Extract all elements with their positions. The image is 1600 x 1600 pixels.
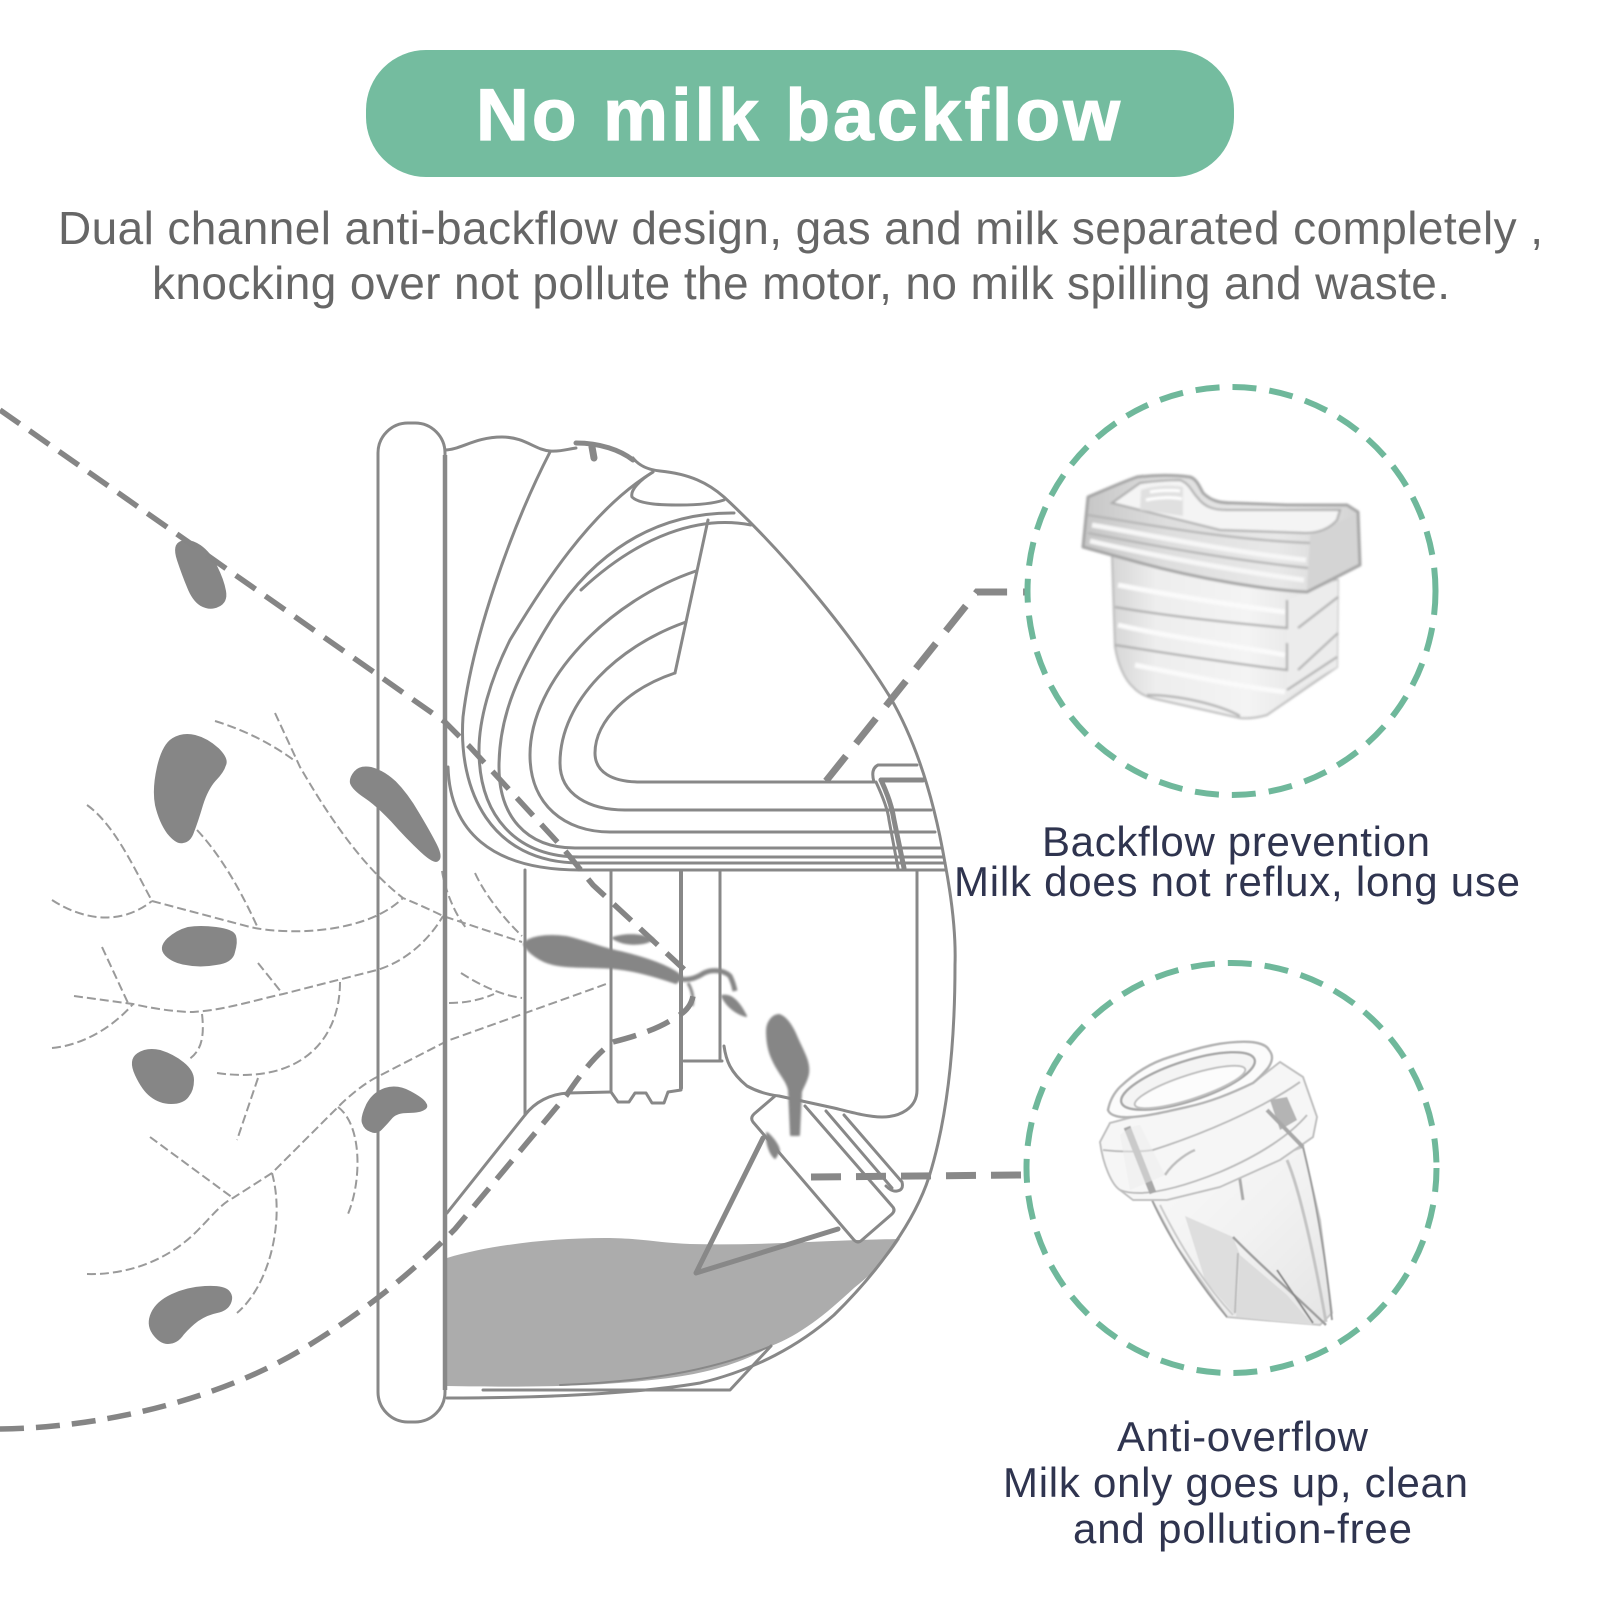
icon: silicone backflow valve bbox=[1083, 476, 1360, 718]
callout connector upper bbox=[826, 592, 1027, 781]
caption: backflow prevention: Milk does not reflux, long use bbox=[954, 858, 1520, 905]
caption: anti-overflow: Anti-overflow bbox=[1117, 1413, 1369, 1460]
caption: anti-overflow: and pollution-free bbox=[1073, 1505, 1412, 1552]
caption: anti-overflow: Milk only goes up, clean bbox=[1003, 1459, 1468, 1506]
milk fill in bottle bbox=[447, 1238, 900, 1387]
icon: clear duckbill valve bbox=[1100, 1040, 1332, 1325]
lower chamber lines bbox=[447, 870, 917, 1213]
milk drops bbox=[133, 541, 440, 1343]
nested channel lines bbox=[448, 452, 945, 870]
caption: anti-overflow bbox=[1003, 1413, 1468, 1552]
caption: backflow prevention: Backflow prevention bbox=[1042, 818, 1430, 865]
callout connector lower bbox=[811, 1175, 1022, 1177]
description text: Dual channel anti-backflow design, gas and milk separated completely , bbox=[58, 202, 1543, 254]
dashed circle lower bbox=[1026, 963, 1436, 1373]
milk flowing through channel bbox=[524, 935, 808, 1158]
dashed circle upper bbox=[1028, 387, 1436, 795]
breast shield flange bbox=[378, 423, 445, 1422]
description text bbox=[58, 202, 1543, 309]
description text: knocking over not pollute the motor, no milk spilling and waste. bbox=[152, 257, 1450, 309]
caption: backflow prevention bbox=[954, 818, 1520, 905]
check valve flap and triangle bbox=[696, 1096, 902, 1273]
title pill bbox=[366, 50, 1234, 177]
lower long dashed line bbox=[0, 985, 694, 1429]
bottle bottom notch bbox=[483, 1346, 771, 1390]
upper long dashed line bbox=[0, 410, 688, 973]
title pill: No milk backflow bbox=[476, 75, 1120, 156]
milk ducts dashed network bbox=[52, 713, 609, 1313]
pump body outline bbox=[445, 437, 955, 1398]
